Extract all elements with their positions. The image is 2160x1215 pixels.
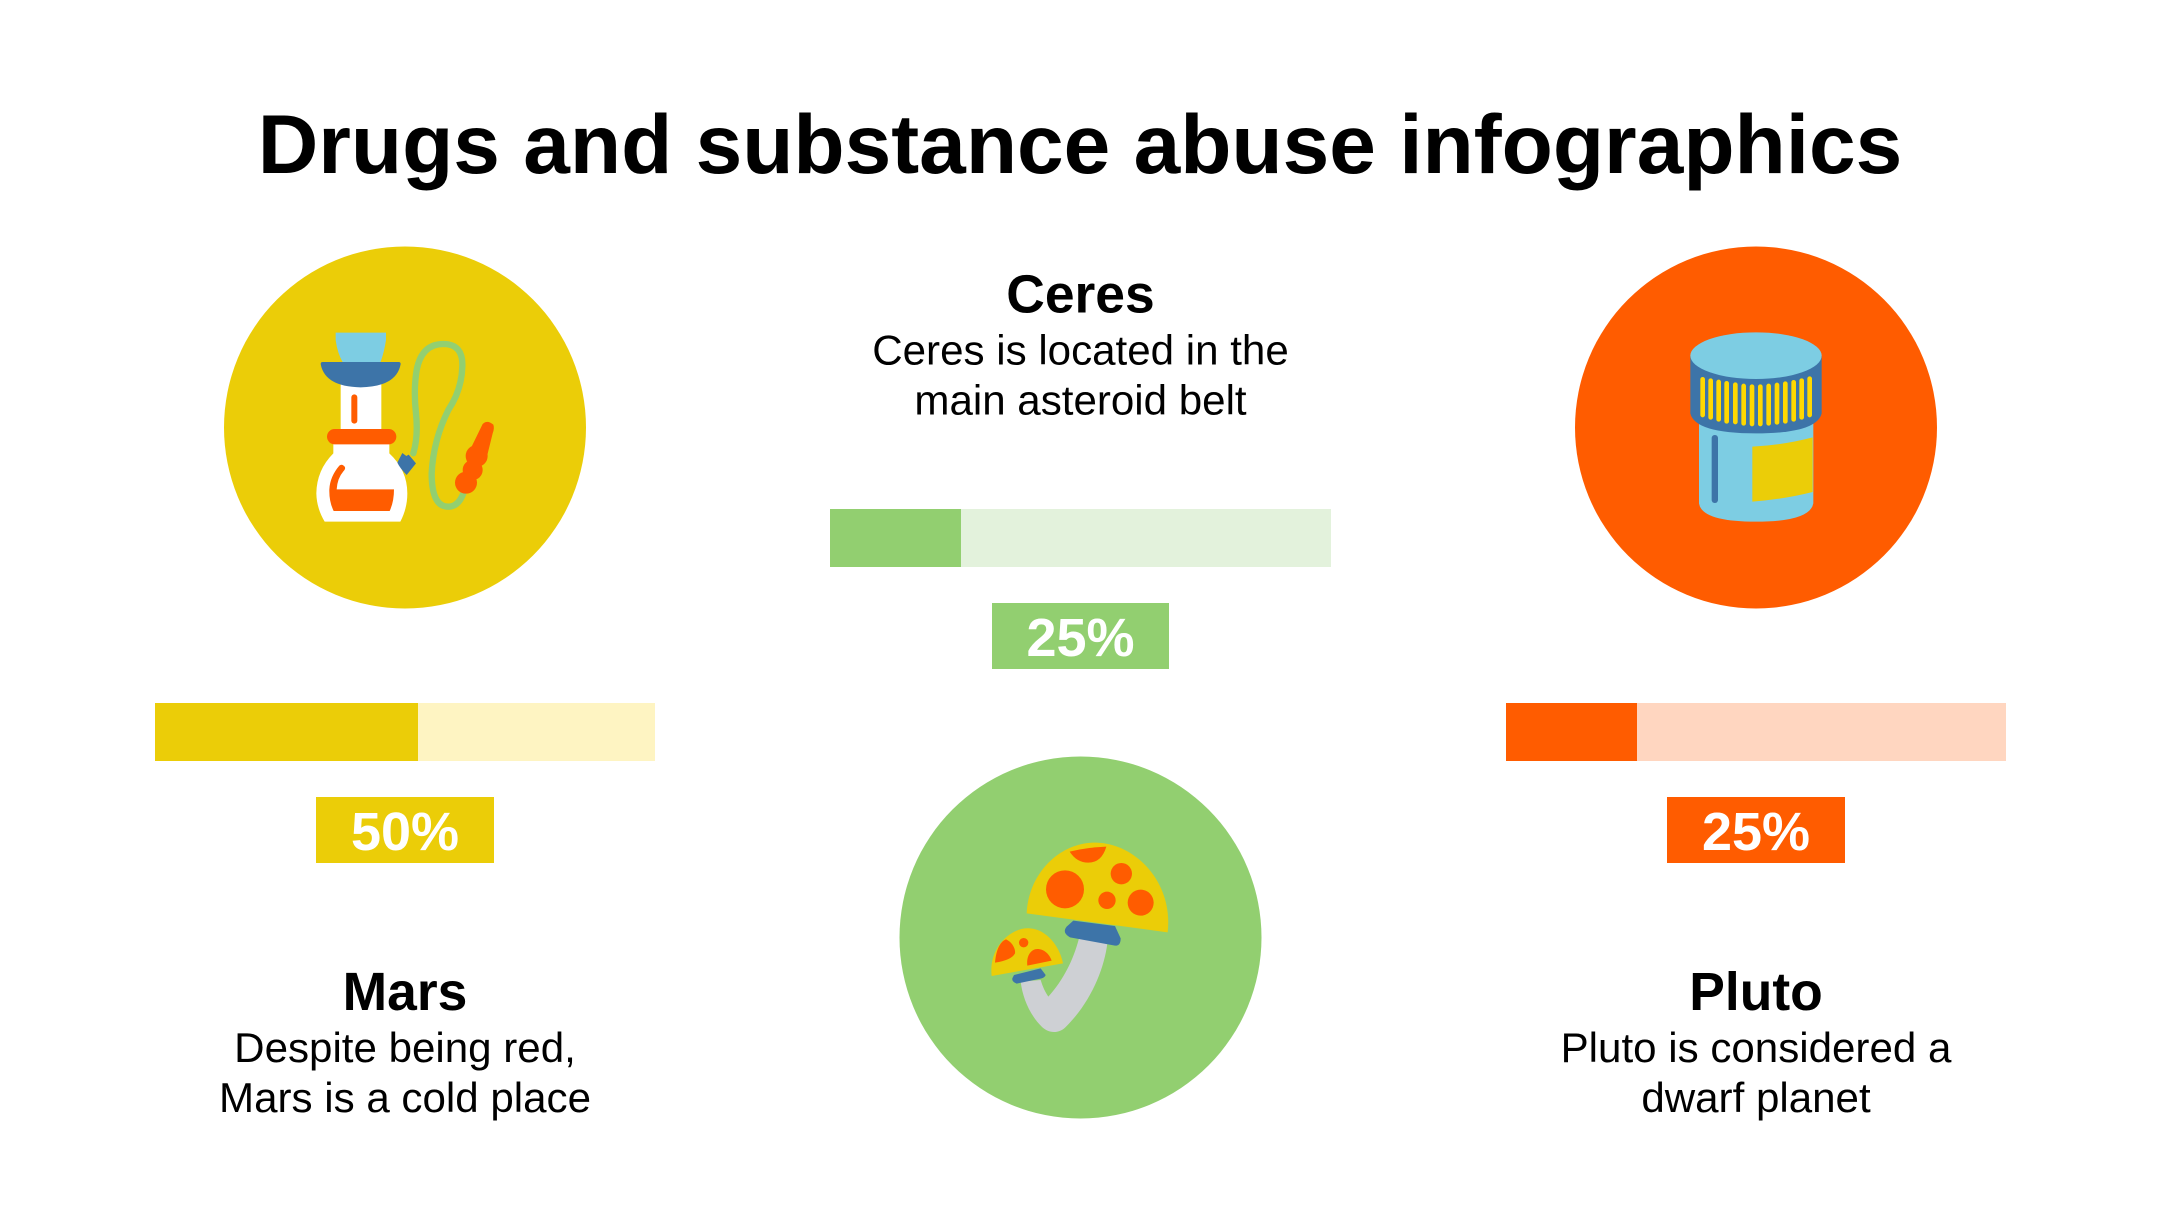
text block: Mars: Mars is a cold place [219,1074,591,1121]
text block: Mars: Despite being red, [234,1024,576,1071]
text block: Pluto [1561,963,1952,1121]
text block: Mars [219,963,591,1121]
panel: Mars [155,246,655,1121]
text block: Ceres [872,266,1289,424]
text block: Ceres: Ceres is located in the [872,326,1289,374]
percentage label: Mars [316,797,494,863]
text block: Ceres: main asteroid belt [914,376,1247,424]
percentage label: Pluto [1667,797,1845,863]
percentage label: Ceres [992,603,1169,669]
icon: pill jar on orange circle [1575,246,1937,608]
text block: Pluto: Pluto is considered a [1561,1024,1952,1071]
panel: Ceres [830,266,1331,1118]
percentage label: Ceres: 25% [1026,608,1135,668]
progress bar: Ceres 25% [830,509,1331,567]
progress bar: Pluto 25% [1506,703,2006,761]
icon: hookah on yellow circle [224,246,586,608]
icon: mushrooms on green circle [900,756,1262,1118]
progress bar: Mars 50% [155,703,655,761]
title: Drugs and substance abuse infographics [258,97,1902,191]
text block: Mars: Mars [343,963,467,1022]
percentage label: Pluto: 25% [1702,802,1810,862]
text block: Pluto: Pluto [1689,963,1823,1022]
panel: Pluto [1506,246,2006,1121]
percentage label: Mars: 50% [351,802,459,862]
text block: Ceres: Ceres [1006,266,1155,324]
text block: Pluto: dwarf planet [1641,1074,1871,1121]
